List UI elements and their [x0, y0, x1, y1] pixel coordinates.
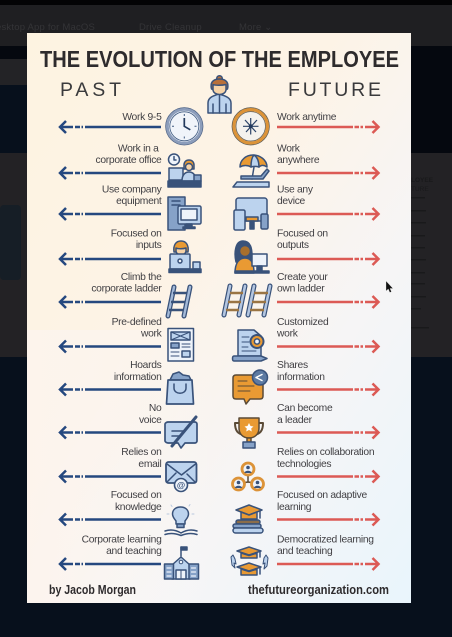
row 3 left: company equipment: equipment [116, 196, 162, 207]
row 4 left: inputs: inputs [136, 240, 162, 251]
icon: trophy [235, 418, 263, 448]
background ghost text: LOYEE [411, 177, 434, 184]
row 3 left: company equipment: Use company [102, 185, 163, 196]
row 10 right: adaptive: Focused on adaptive [277, 490, 367, 501]
row 11 right: democratized learning: Democratized learning [277, 535, 374, 546]
heading: past: PAST [60, 79, 121, 101]
row 6 left: pre-defined: work [140, 329, 163, 340]
row 5 right: own ladder: own ladder [277, 284, 325, 295]
heading: future: FUTURE [288, 79, 381, 101]
row 2 right: work anywhere: Work [277, 144, 301, 155]
icon: email envelope [166, 462, 196, 492]
icon: muted speech bubble [165, 417, 197, 448]
row 6 right: customized [276, 317, 378, 352]
row 11 right: democratized learning [277, 535, 378, 570]
row 3 left: company equipment [60, 185, 163, 220]
icon: person with laptop [169, 241, 201, 272]
icon: custom document with gear [232, 330, 267, 361]
website: thefutureorganization.com [248, 583, 389, 597]
row 11 left: corporate learning [60, 535, 162, 570]
background app tabs: Drive Cleanup [139, 22, 202, 33]
row 2 right: work anywhere: anywhere [277, 155, 320, 166]
row 11 right: democratized learning: and teaching [277, 546, 333, 557]
icon: orange clock [232, 108, 269, 145]
row 7 left: hoards: information [114, 372, 162, 383]
row 1 right: work anytime [277, 112, 378, 133]
background app tabs: More ⌄ [239, 22, 272, 33]
row 8 left: no voice: voice [139, 415, 162, 426]
row 7 left: hoards: Hoards [130, 360, 162, 371]
row 4 right: outputs: outputs [277, 240, 309, 251]
row 7 right: shares [277, 360, 378, 396]
row 6 right: customized: Customized [277, 317, 329, 328]
row 11 left: corporate learning: Corporate learning [82, 535, 162, 546]
row 1 right: work anytime: Work anytime [277, 112, 337, 123]
row 1 left: work 9-5 [60, 112, 162, 133]
icon: document layout [168, 328, 194, 361]
row 8 right: leader: Can become [277, 403, 333, 414]
background ghost text: TURE [411, 186, 429, 193]
row 10 left: knowledge [60, 490, 162, 526]
row 4 left: inputs [60, 229, 162, 265]
row 9 left: email: email [138, 459, 162, 470]
row 2 left: corporate office: Work in a [118, 144, 159, 155]
icon: ladder [168, 287, 190, 316]
row 9 left: email: Relies on [121, 447, 162, 458]
poster panel [27, 33, 411, 603]
row 9 right: collaboration: Relies on collaboration [277, 447, 375, 458]
background ghost text [411, 177, 434, 328]
icon: office desk [168, 154, 201, 187]
row 4 right: outputs [277, 229, 378, 265]
row 5 left: ladder: Climb the [121, 272, 162, 283]
icon: two ladders [224, 286, 270, 315]
row 6 left: pre-defined [60, 317, 163, 352]
icon: employee [208, 76, 231, 113]
row 8 right: leader [277, 403, 378, 438]
row 9 right: collaboration: technologies [277, 459, 331, 470]
icon: share chat bubble [233, 370, 268, 404]
row 9 left: email [60, 447, 162, 482]
row 3 right: any device: Use any [277, 185, 314, 196]
icon: multiple devices [234, 198, 268, 230]
row 8 right: leader: a leader [277, 415, 313, 426]
row 10 left: knowledge: knowledge [115, 502, 162, 513]
row 2 left: corporate office: corporate office [96, 155, 162, 166]
row 7 right: shares: information [277, 372, 325, 383]
row 1 left: work 9-5: Work 9-5 [122, 112, 162, 123]
row 7 right: shares: Shares [277, 360, 308, 371]
icon: connected people [232, 463, 264, 490]
row 8 left: no voice: No [149, 403, 162, 414]
row 5 right: own ladder: Create your [277, 272, 328, 283]
icon: wall clock [166, 108, 203, 145]
title: THE EVOLUTION OF THE EMPLOYEE [40, 46, 399, 72]
row 8 left: no voice [60, 403, 162, 438]
row 10 right: adaptive [277, 490, 378, 526]
icon: remote worker [235, 241, 269, 273]
icon: graduation cap over books [233, 505, 263, 533]
row 6 right: customized: work [276, 329, 299, 340]
row 4 left: inputs: Focused on [111, 229, 162, 240]
icon: light bulb over open book [165, 504, 197, 536]
icon: graduation caps in cycle [231, 547, 268, 575]
row 11 left: corporate learning: and teaching [106, 546, 162, 557]
author credit: by Jacob Morgan [49, 583, 136, 597]
mouse cursor [386, 281, 393, 292]
row 7 left: hoards [60, 360, 162, 396]
row 4 right: outputs: Focused on [277, 229, 328, 240]
row 10 right: adaptive: learning [277, 502, 312, 513]
icon: shopping bag of information [166, 372, 194, 404]
row 2 right: work anywhere [277, 144, 378, 179]
row 5 right: own ladder [277, 272, 378, 308]
row 2 left: corporate office [60, 144, 162, 179]
icon: school building [164, 547, 198, 579]
background app tabs [0, 22, 272, 33]
row 3 right: any device [277, 185, 378, 220]
row 6 left: pre-defined: Pre-defined [112, 317, 162, 328]
row 9 right: collaboration [277, 447, 378, 482]
icon: beach chair and umbrella [233, 155, 269, 187]
row 3 right: any device: device [277, 196, 306, 207]
row 5 left: ladder: corporate ladder [91, 284, 162, 295]
row 10 left: knowledge: Focused on [111, 490, 162, 501]
row 5 left: ladder [60, 272, 162, 308]
icon: desktop computer [168, 197, 201, 230]
icon: email envelope: @ [177, 480, 185, 490]
